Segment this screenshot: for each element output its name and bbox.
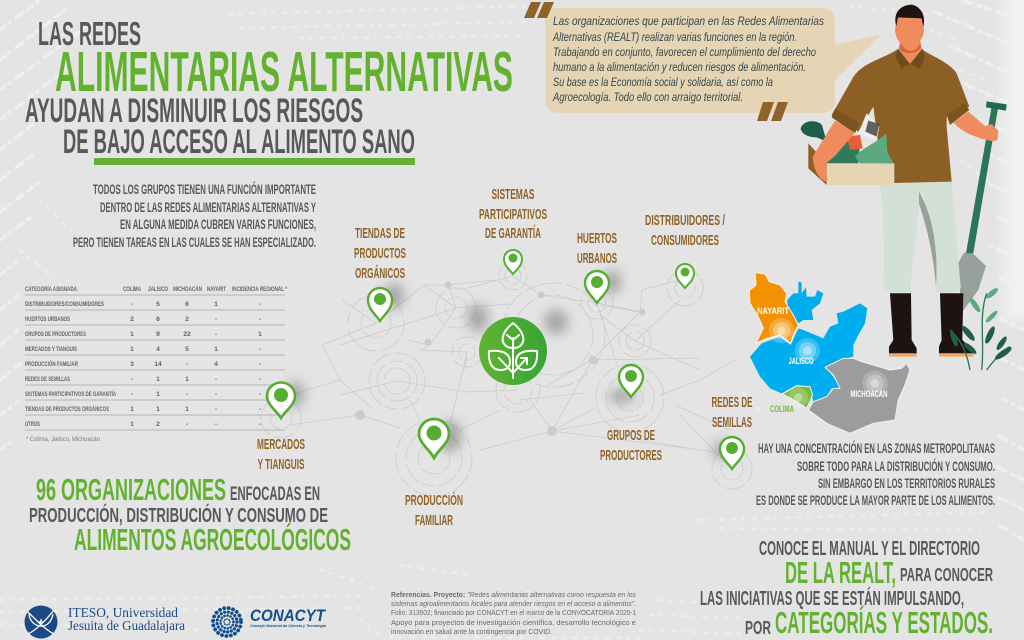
quote bubble: Trabajando en conjunto, favorecen el cumplimiento del derecho — [553, 47, 816, 59]
boots — [889, 293, 973, 357]
title: AYUDAN A DISMINUIR LOS RIESGOS — [25, 92, 363, 130]
title — [25, 15, 513, 165]
data table: 1 — [156, 391, 160, 398]
references text block: Folio: 313502; financiado por CONACYT en el marco de la CONVOCATORIA 2020-1 — [391, 608, 636, 617]
data table: 9 — [156, 331, 160, 338]
label: Produccion familiar: PRODUCCIÓN — [405, 491, 463, 509]
data table: 6 — [156, 316, 160, 323]
data table: - — [259, 406, 261, 413]
data table: - — [186, 361, 188, 368]
data table: 1 — [130, 421, 134, 428]
references text block: Apoyo para proyectos de investigación científica, desarrollo tecnológico e — [391, 618, 636, 627]
data table: - — [259, 376, 261, 383]
quote bubble: Alternativas (REALT) realizan varias funciones en la región. — [552, 32, 797, 44]
references text block: innovación en salud ante la contingencia por COVID. — [391, 627, 552, 636]
label: Sistemas participativos de garantia — [479, 186, 547, 242]
data table: MICHOACÁN — [173, 284, 202, 293]
data table: 6 — [185, 301, 189, 308]
pin: Sistemas participativos — [504, 250, 522, 274]
pin: Mercados y tianguis — [267, 382, 295, 418]
logo: ITESO — [24, 605, 185, 638]
intro text block: PERO TIENEN TAREAS EN LAS CUALES SE HAN ESPECIALIZADO. — [73, 235, 316, 250]
Michoacan region — [808, 358, 910, 433]
data table: OTROS — [25, 421, 40, 428]
label: Mercados y tianguis: MERCADOS — [257, 436, 305, 453]
data table: - — [186, 391, 188, 398]
label: Mercados y tianguis — [257, 436, 305, 473]
map label: Michoacan: MICHOACÁN — [850, 389, 888, 400]
label: Produccion familiar — [405, 491, 463, 529]
illustration: farmer with vegetable box and shovel — [801, 5, 1013, 370]
organizations statement: ALIMENTOS AGROECOLÓGICOS — [74, 521, 351, 557]
references text block — [391, 590, 636, 636]
location glows — [769, 318, 888, 408]
logo: ITESO: ITESO, Universidad — [68, 605, 178, 620]
data table: 1 — [185, 406, 189, 413]
regional concentration text — [756, 441, 995, 508]
quote bubble: humano a la alimentación y reducen riesgos de alimentación. — [553, 62, 806, 74]
data table: 1 — [156, 406, 160, 413]
map of states — [749, 273, 910, 433]
pin: Distribuidores / consumidores — [676, 264, 694, 288]
label: Redes de semillas — [712, 394, 752, 431]
map label: Nayarit: NAYARIT — [757, 306, 789, 317]
organizations statement: 96 ORGANIZACIONES — [36, 472, 226, 507]
pin: Produccion familiar — [419, 419, 449, 458]
data table: 1 — [214, 346, 218, 353]
data table: 22 — [183, 331, 191, 338]
Nayarit region — [749, 273, 798, 343]
data table: HUERTOS URBANOS — [25, 316, 70, 323]
data table: 3 — [130, 361, 134, 368]
intro text block: TODOS LOS GRUPOS TIENEN UNA FUNCIÓN IMPORTANTE — [93, 182, 316, 197]
label: Redes de semillas: REDES DE — [712, 394, 752, 411]
label: Produccion familiar: FAMILIAR — [415, 512, 453, 529]
data table: - — [259, 391, 261, 398]
data table: - — [215, 391, 217, 398]
data table: 1 — [130, 346, 134, 353]
references text block: sistemas agroalimentarios locales para atender riesgos en el acceso a alimentos". — [391, 599, 636, 608]
data table: 2 — [156, 421, 160, 428]
label: Huertos urbanos: HUERTOS — [577, 230, 617, 247]
data table: - — [186, 421, 188, 428]
label: Tiendas de productos organicos: TIENDAS DE — [355, 225, 405, 242]
pin: Grupos de productores — [619, 365, 643, 397]
vegetable box — [801, 113, 894, 185]
neck and head — [895, 5, 924, 65]
shovel — [958, 101, 1007, 313]
data table: - — [215, 421, 217, 428]
data table: SISTEMAS PARTICIPATIVOS DE GARANTÍA — [25, 389, 116, 398]
data table: - — [259, 421, 261, 428]
pin: Redes de semillas — [720, 437, 744, 469]
trousers — [880, 182, 961, 293]
label: Grupos de productores: GRUPOS DE — [607, 427, 655, 444]
data table: 4 — [214, 361, 218, 368]
data table: 5 — [185, 346, 189, 353]
label: Tiendas de productos organicos: ORGÁNICOS — [355, 265, 405, 282]
data table: 14 — [154, 361, 162, 368]
data table: - — [259, 316, 261, 323]
data table — [25, 284, 287, 443]
pin shadows — [286, 270, 731, 459]
title: LAS REDES — [38, 15, 141, 52]
organizations statement — [29, 472, 351, 557]
logo: CONACYT: CONACYT — [250, 606, 326, 625]
quote bubble — [524, 2, 882, 121]
quote bubble: Su base es la Economía social y solidaria, así como la — [553, 77, 773, 89]
data table: - — [259, 346, 261, 353]
data table: - — [215, 406, 217, 413]
data table: 1 — [130, 331, 134, 338]
quote bubble: Las organizaciones que participan en las Redes Alimentarias — [553, 16, 824, 28]
data table: 2 — [130, 316, 134, 323]
title: DE BAJO ACCESO AL ALIMENTO SANO — [63, 123, 415, 161]
logo: CONACYT — [213, 606, 326, 636]
call to action: POR — [745, 618, 771, 638]
pin: Huertos urbanos — [585, 271, 609, 303]
intro text block — [73, 182, 316, 250]
data table: 1 — [130, 406, 134, 413]
data table: - — [215, 316, 217, 323]
label: Grupos de productores — [600, 427, 662, 464]
organizations statement: ENFOCADAS EN — [230, 484, 320, 505]
data table: - — [131, 376, 133, 383]
intro text block: DENTRO DE LAS REDES ALIMENTARIAS ALTERNATIVAS Y — [100, 200, 316, 215]
label: Sistemas participativos de garantia: DE GARANTÍA — [485, 225, 541, 242]
data table: - — [259, 301, 261, 308]
data table: NAYARIT — [207, 286, 227, 293]
data table: JALISCO — [148, 286, 168, 293]
data table: - — [131, 301, 133, 308]
call to action: DE LA REALT, — [785, 555, 896, 590]
logo: ITESO: Jesuita de Guadalajara — [68, 618, 185, 633]
Jalisco region — [750, 282, 867, 402]
intro text block: EN ALGUNA MEDIDA CUBREN VARIAS FUNCIONES, — [120, 217, 316, 232]
label: Distribuidores / consumidores: DISTRIBUIDORES / — [645, 212, 725, 229]
data table: * Colima, Jalisco, Michoacán — [26, 436, 101, 443]
title: ALIMENTARIAS ALTERNATIVAS — [55, 40, 513, 104]
data table: 4 — [156, 346, 160, 353]
label: Tiendas de productos organicos — [354, 225, 406, 282]
data table: PRODUCCIÓN FAMILIAR — [25, 359, 78, 368]
data table: GRUPOS DE PRODUCTORES — [25, 331, 86, 338]
plant — [949, 287, 1013, 370]
data table: 2 — [185, 316, 189, 323]
label: Distribuidores / consumidores: CONSUMIDORES — [651, 232, 719, 249]
map label: Jalisco: JALISCO — [788, 356, 814, 367]
data table: 1 — [258, 331, 262, 338]
data table: 1 — [214, 301, 218, 308]
data table: - — [131, 391, 133, 398]
right arm — [953, 112, 998, 141]
references text block: Referencias. Proyecto: "Redes alimentarias alternativas como respuesta en los — [391, 590, 636, 599]
logo: CONACYT: Consejo Nacional de Ciencia y Tecnología — [250, 624, 326, 628]
data table: MERCADOS Y TIANGUIS — [25, 346, 77, 353]
label: Distribuidores / consumidores — [645, 212, 725, 249]
label: Mercados y tianguis: Y TIANGUIS — [258, 456, 304, 473]
call to action — [700, 538, 993, 640]
data table: - — [259, 361, 261, 368]
organizations statement: PRODUCCIÓN, DISTRIBUCIÓN Y CONSUMO DE — [29, 503, 328, 527]
network diagram background — [261, 262, 752, 496]
pin: Tiendas de productos organicos — [368, 288, 392, 321]
data table: DISTRIBUIDORES/CONSUMIDORES — [25, 301, 104, 308]
data table: CATEGORÍA ASIGNADA — [25, 284, 77, 293]
data table: TIENDAS DE PRODUCTOS ORGÁNICOS — [25, 404, 109, 413]
central plant icon — [479, 317, 547, 385]
data table: 5 — [156, 301, 160, 308]
label: Tiendas de productos organicos: PRODUCTOS — [354, 245, 406, 262]
label: Huertos urbanos: URBANOS — [577, 250, 617, 267]
data table: INCIDENCIA REGIONAL * — [232, 286, 287, 293]
label: Sistemas participativos de garantia: SISTEMAS — [492, 186, 534, 203]
shirt — [832, 48, 969, 183]
label: Redes de semillas: SEMILLAS — [712, 414, 752, 431]
data table: 1 — [156, 376, 160, 383]
data table: - — [215, 331, 217, 338]
data table: COLIMA — [123, 286, 141, 293]
data table: 1 — [185, 376, 189, 383]
map label: Colima: COLIMA — [770, 404, 794, 415]
Colima region — [783, 386, 813, 408]
data table: - — [215, 376, 217, 383]
data table: REDES DE SEMILLAS — [25, 376, 70, 383]
quote bubble: Agroecología. Todo ello con arraigo territorial. — [552, 92, 743, 104]
label: Sistemas participativos de garantia: PARTICIPATIVOS — [479, 206, 547, 223]
label: Huertos urbanos — [577, 230, 617, 267]
label: Grupos de productores: PRODUCTORES — [600, 447, 662, 464]
